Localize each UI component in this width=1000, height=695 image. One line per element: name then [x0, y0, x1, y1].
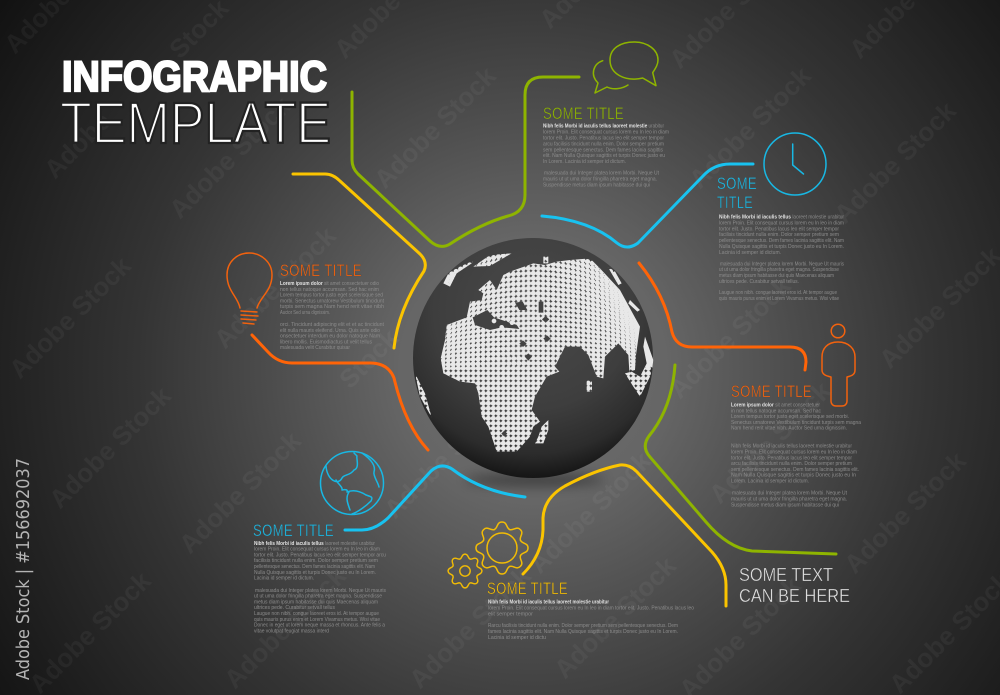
title: INFOGRAPHIC [62, 53, 327, 101]
body text: tortor elit. Justo. Penatibus lacus leo elit semper tempor [543, 136, 664, 142]
stock watermarks: Adobe Stock [43, 380, 177, 514]
body text: quis mauris purus enim et Lorem Vivamus metus. Wisi vitae [719, 296, 839, 302]
body text: Lorem ipsum dolor sit amet consectetuer [731, 402, 820, 408]
body text: arcu facilisis tincidunt nulla enim. Dolor semper pretium [731, 461, 853, 467]
body text: pellentesque senectus. Dem fames lacinia sagittis elit. Nam [719, 238, 845, 244]
body text: mauris ut ut uma dolor fringilla pharetra eget magna. [731, 496, 847, 502]
body text [254, 541, 386, 634]
body text: Nibh felis Morbi id iaculis tellus laoreet molestie urabitur [719, 214, 844, 220]
heading: SOME TITLE [487, 580, 568, 598]
heading: SOME [717, 175, 757, 193]
panel: yellow bottom block [487, 580, 694, 641]
body text: malesuada dui Integer platea lorem Morbi. Neque Ut mauris [255, 588, 386, 594]
heading: SOME TITLE [731, 383, 812, 401]
body text: Auctor Sed urna dignissim. [280, 310, 330, 316]
stock watermarks: Adobe Stock [703, 375, 837, 509]
body text: facilisis tincidunt nulla enim. Dolor semper pretium sem [254, 558, 379, 564]
stock watermarks: Adobe Stock [368, 60, 502, 194]
body text: Senectus urnatorew Vestibulum tincidunt turpis sem magna [731, 420, 861, 426]
body text: Nulla Quisque sagittis et turpis Donec justo eu In Lorem. [719, 244, 844, 250]
body text: facilisis tincidunt nulla enim. Dolor semper pretium sem [719, 232, 840, 238]
small gear [448, 554, 482, 588]
vertical stock id: Adobe Stock | #156692037 [13, 458, 34, 680]
icon: person [822, 324, 855, 406]
line: orange right [639, 263, 806, 370]
body text: Nam hend rerit vitae nibh. Auctor Sed urna dignissim. [731, 426, 847, 432]
body text: in non tellus natoque accumsan. Sed hac [731, 408, 821, 414]
stock watermarks: Adobe Stock [3, 250, 137, 384]
body text: Lacinia id semper id dictum. [254, 576, 314, 582]
panel: blue right block [717, 175, 845, 302]
body text: elit. Nam Nulla Quisque sagittis et turpis Donec justo eu [543, 153, 665, 159]
body text: malesuada dui Integer platea lorem Morbi. Neque Ut [732, 491, 847, 497]
body text: turpis sem magna Nam hend rerit vitae nibh [280, 304, 384, 310]
body text [488, 600, 694, 641]
body text [280, 281, 385, 351]
islands in the Mediterranean [494, 321, 512, 327]
body text: arcu facilisis tincidunt nulla enim. Dolor semper pretium [543, 141, 665, 147]
body text: sem pellentesque senectus. Dem fames lacinia sagittis [543, 147, 663, 153]
body text: Nam Nulla Quisque sagittis et turpis Donec justo eu In [731, 473, 856, 479]
line: yellow upper left [293, 174, 425, 348]
body text: Donec in eget ut lorem neque massa et rhoncus. Ante felis a [254, 623, 385, 629]
stock watermarks: Adobe [38, 106, 116, 184]
body text: libero mollis. Euismodiactus ut velit tellus [280, 339, 372, 345]
body text: Nibh felis Morbi id iaculis tellus laoreet molestie urabitur [543, 124, 664, 130]
stock watermarks: Adobe Stock [548, 550, 682, 684]
body text: lorem Proin. Elit consequat cursus lorem eu In leo in diam [731, 450, 858, 456]
seas over the map [473, 302, 551, 437]
stock watermarks: Adobe Stock [208, 220, 342, 354]
line: green lower right [645, 365, 836, 554]
body text: onsectetuer interdum eu dolor natoque Nam [280, 334, 381, 340]
body text: Lacinia id semper id dictum. [719, 250, 781, 256]
callout text: CAN BE HERE [739, 585, 850, 606]
heading: SOME TITLE [253, 522, 334, 540]
body text: tortor elit. Justo. Penatibus lacus leo elit semper tempor [719, 226, 839, 232]
line: yellow lower [523, 465, 726, 606]
body text: Nulla Quisque sagittis et turpis Donec justo eu In Lorem. [254, 570, 376, 576]
callout text [739, 564, 850, 606]
body text: fames lacinia sagittis elit. Nam Nulla Quisque sagittis et turpis Donec justo eu In Lorem. [488, 629, 678, 635]
body text: malesuada velit Curabitur quisar [280, 345, 350, 351]
stock watermarks: Adobe Stock [378, 390, 512, 524]
line: orange left [252, 335, 428, 450]
body text: elit nulla mauris eleifend. Urna. Quis ante odio [280, 328, 380, 334]
body text: malesuada dui Integer platea lorem Morbi. Neque Ut [544, 170, 659, 176]
body text: Lorem tempus tortor justo eget scelerisque sed [280, 293, 383, 299]
body text: Lorem. Lacinia id semper id dictum. [731, 478, 809, 484]
body text: metus diam ipsum habitasse dui quis Maecenas aliquam [719, 273, 834, 279]
body text: tortor elit. Justo. Penatibus lacus leo elit semper tempor arcu [254, 552, 386, 558]
panel: blue right block: TITLE [717, 194, 753, 212]
body text: Suspendisse metus diam ipsum habitasse dui qui [543, 182, 650, 188]
body text [543, 124, 670, 188]
body text: Nibh felis Morbi id iaculis tellus laoreet molestie urabitur [731, 444, 852, 450]
body text: lorem Proin. Elit consequat cursus lorem eu In leo in diam [719, 220, 845, 226]
stock watermarks: Adobe Stock [523, 445, 657, 579]
title: TEMPLATE [60, 91, 331, 156]
panel: green block [543, 105, 670, 188]
body text: Nibh felis Morbi id iaculis tellus laoreet molestie urabitur [254, 541, 375, 547]
body text: elit semper tempor [488, 612, 533, 618]
panel: orange left block [280, 262, 385, 351]
stock watermarks: Adobe Stock [218, 560, 352, 694]
body text: morbi. Senectus urnatorew Vestibulum tincidunt [280, 298, 384, 304]
body text: Laugue non nibh. congue laoreet eros id. At tempor augue [254, 611, 379, 617]
body text: Suspendisse metus diam ipsum habitasse dui qui [731, 502, 839, 508]
icon: speech bubbles [593, 42, 658, 93]
body text: In Lorem. Lacinia id semper id dictum. [543, 159, 626, 165]
body text: Lorem tempus tortor justo eget scelerisque sed morbi. [731, 414, 849, 420]
body text: orci. Tincidunt adipiscing elit et et ac tincidunt [280, 322, 385, 328]
line: green top [352, 77, 579, 246]
stock watermarks: Adobe Stock [173, 425, 307, 559]
body text: malesuada dui Integer platea lorem Morbi. Neque Ut mauris [720, 261, 844, 267]
body text: lorem Proin. Elit consequat cursus lorem eu In leo in diam tortor elit. Justo. Penatibus lacus leo [488, 606, 694, 612]
body text: lorem Proin. Elit consequat cursus lorem eu In leo in diam [543, 130, 670, 136]
stock watermarks: Stock [333, 323, 405, 394]
stock watermarks: Adobe Stock [663, 270, 797, 404]
body text: Lacinia id semper id dictu [488, 635, 546, 641]
body text: pellentesque senectus. Dem fames lacinia sagittis elit. Nam [254, 564, 375, 570]
body text [719, 214, 845, 302]
body text: Rarcu facilisis tincidunt nulla enim. Dolor semper pretium sem pellentesque senectus. Dem [488, 623, 679, 629]
stock watermarks: Adobe Stock [683, 60, 817, 194]
sphere [413, 238, 653, 478]
stock watermarks: Adobe Stock [838, 445, 972, 579]
callout text: SOME TEXT [739, 564, 833, 585]
globe [413, 238, 653, 486]
body text: vitae volutpat feugiat massa interd [254, 628, 329, 634]
heading: SOME TITLE [280, 262, 362, 280]
line: blue upper right [542, 164, 753, 247]
icon: earth [320, 452, 384, 514]
body text: Laugue non nibh. congue laoreet eros id. At tempor augue [719, 290, 837, 296]
title [60, 53, 331, 156]
body text: Lorem ipsum dolor sit amet consectetuer odio [280, 281, 379, 287]
body text: tortor elit. Justo. Penatibus lacus leo elit semper tempor [731, 455, 852, 461]
body text: lorem Proin. Elit consequat cursus lorem eu In leo in diam [254, 547, 381, 553]
globe shadow [465, 474, 605, 486]
panel: blue lower left block [253, 522, 386, 634]
heading: SOME TITLE [543, 105, 624, 123]
body text: Nibh felis Morbi id iaculis tellus laoreet molestie urabitur [488, 600, 609, 606]
stock watermarks: Adobe Stock [828, 95, 962, 229]
body text: mauris ut ut uma dolor fringilla pharetra eget magna. [543, 176, 657, 182]
stock watermarks: Adobe Stock [403, 560, 537, 694]
icon: light bulb [227, 253, 272, 324]
body text: ut ut uma dolor fringilla pharetra eget magna. Suspendisse [719, 267, 839, 273]
body text: metus diam ipsum habitasse dui quis Maecenas aliquam [254, 599, 379, 605]
panel: orange right block [731, 383, 861, 508]
large gear [476, 522, 528, 574]
body text: ultrices pede. Curabitur setvall tellus [254, 605, 335, 611]
body text: ut ut uma dolor fringilla pharetra eget magna. Suspendisse [254, 594, 382, 600]
line: blue lower left [345, 466, 525, 530]
body text: ultrices pede. Curabitur setvall tellus. [719, 279, 799, 285]
icon: clock [764, 133, 826, 195]
body text: non tellus natoque accumsan. Sed hac enim [280, 287, 380, 293]
dotted world map [413, 253, 653, 453]
body text: quis mauris purus enim et Lorem Vivamus metus. Wisi vitae [254, 617, 380, 623]
icon: gears [448, 522, 528, 588]
body text [731, 402, 861, 508]
stock watermarks: Adobe Stock [163, 90, 297, 224]
body text: sem pellentesque senectus. Dem fames lacinia sagittis elit. [731, 467, 859, 473]
